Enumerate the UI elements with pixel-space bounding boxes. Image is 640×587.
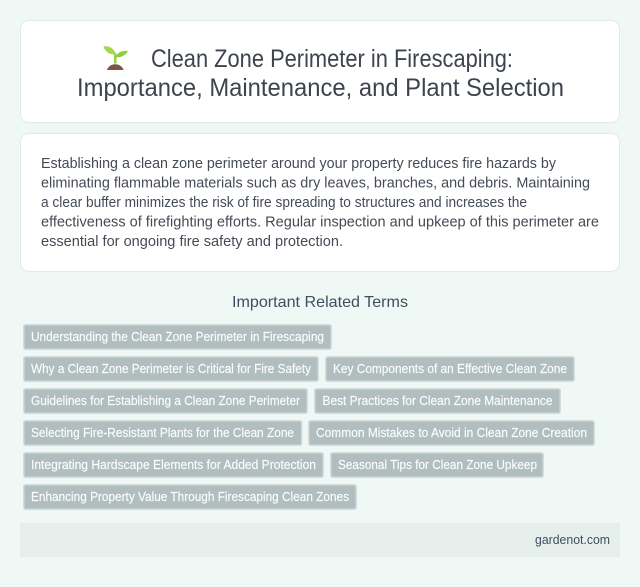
title: Importance, Maintenance, and Plant Selection — [77, 74, 564, 102]
footer — [20, 523, 620, 557]
tag: Seasonal Tips for Clean Zone Upkeep — [338, 458, 537, 472]
panel: description — [20, 134, 620, 272]
tag: Selecting Fire-Resistant Plants for the Clean Zone — [31, 426, 294, 440]
text block: description paragraph: eliminating flammable materials such as dry leaves, branches, and debris. Maintaining — [41, 174, 590, 192]
tag — [24, 485, 356, 509]
tag — [309, 421, 594, 445]
tag: Guidelines for Establishing a Clean Zone Perimeter — [31, 394, 300, 408]
text block: description paragraph: effectiveness of firefighting efforts. Regular inspection and upkeep of this perimeter are — [41, 214, 599, 230]
text block: description paragraph: essential for ongoing fire safety and protection. — [41, 233, 343, 250]
tag — [315, 389, 560, 413]
text block: description paragraph — [41, 155, 599, 250]
panel: title card — [20, 20, 620, 122]
tag — [24, 325, 331, 349]
tag — [24, 357, 318, 381]
tag: Enhancing Property Value Through Firescaping Clean Zones — [31, 490, 349, 504]
title: Clean Zone Perimeter in Firescaping: — [151, 45, 513, 73]
footer: gardenot.com — [535, 533, 610, 547]
text block: description paragraph: Establishing a clean zone perimeter around your property reduces fire hazards by — [41, 155, 556, 172]
tag: Best Practices for Clean Zone Maintenance — [322, 394, 553, 408]
tag — [24, 453, 323, 477]
icon: seedling — [104, 46, 128, 70]
tag: Common Mistakes to Avoid in Clean Zone Creation — [316, 426, 587, 440]
heading: related terms: Important Related Terms — [232, 294, 408, 311]
title — [77, 45, 564, 102]
tag — [331, 453, 543, 477]
text block: description paragraph: a clear buffer minimizes the risk of fire spreading to structures and increases the — [41, 194, 527, 211]
tag — [24, 421, 302, 445]
tag: Key Components of an Effective Clean Zone — [333, 362, 567, 376]
tag: Why a Clean Zone Perimeter is Critical for Fire Safety — [31, 362, 312, 376]
tag: Integrating Hardscape Elements for Added Protection — [31, 458, 316, 472]
tag — [326, 357, 574, 381]
tag: Understanding the Clean Zone Perimeter in Firescaping — [31, 330, 324, 344]
panel: term tags — [24, 325, 594, 509]
tag — [24, 389, 307, 413]
